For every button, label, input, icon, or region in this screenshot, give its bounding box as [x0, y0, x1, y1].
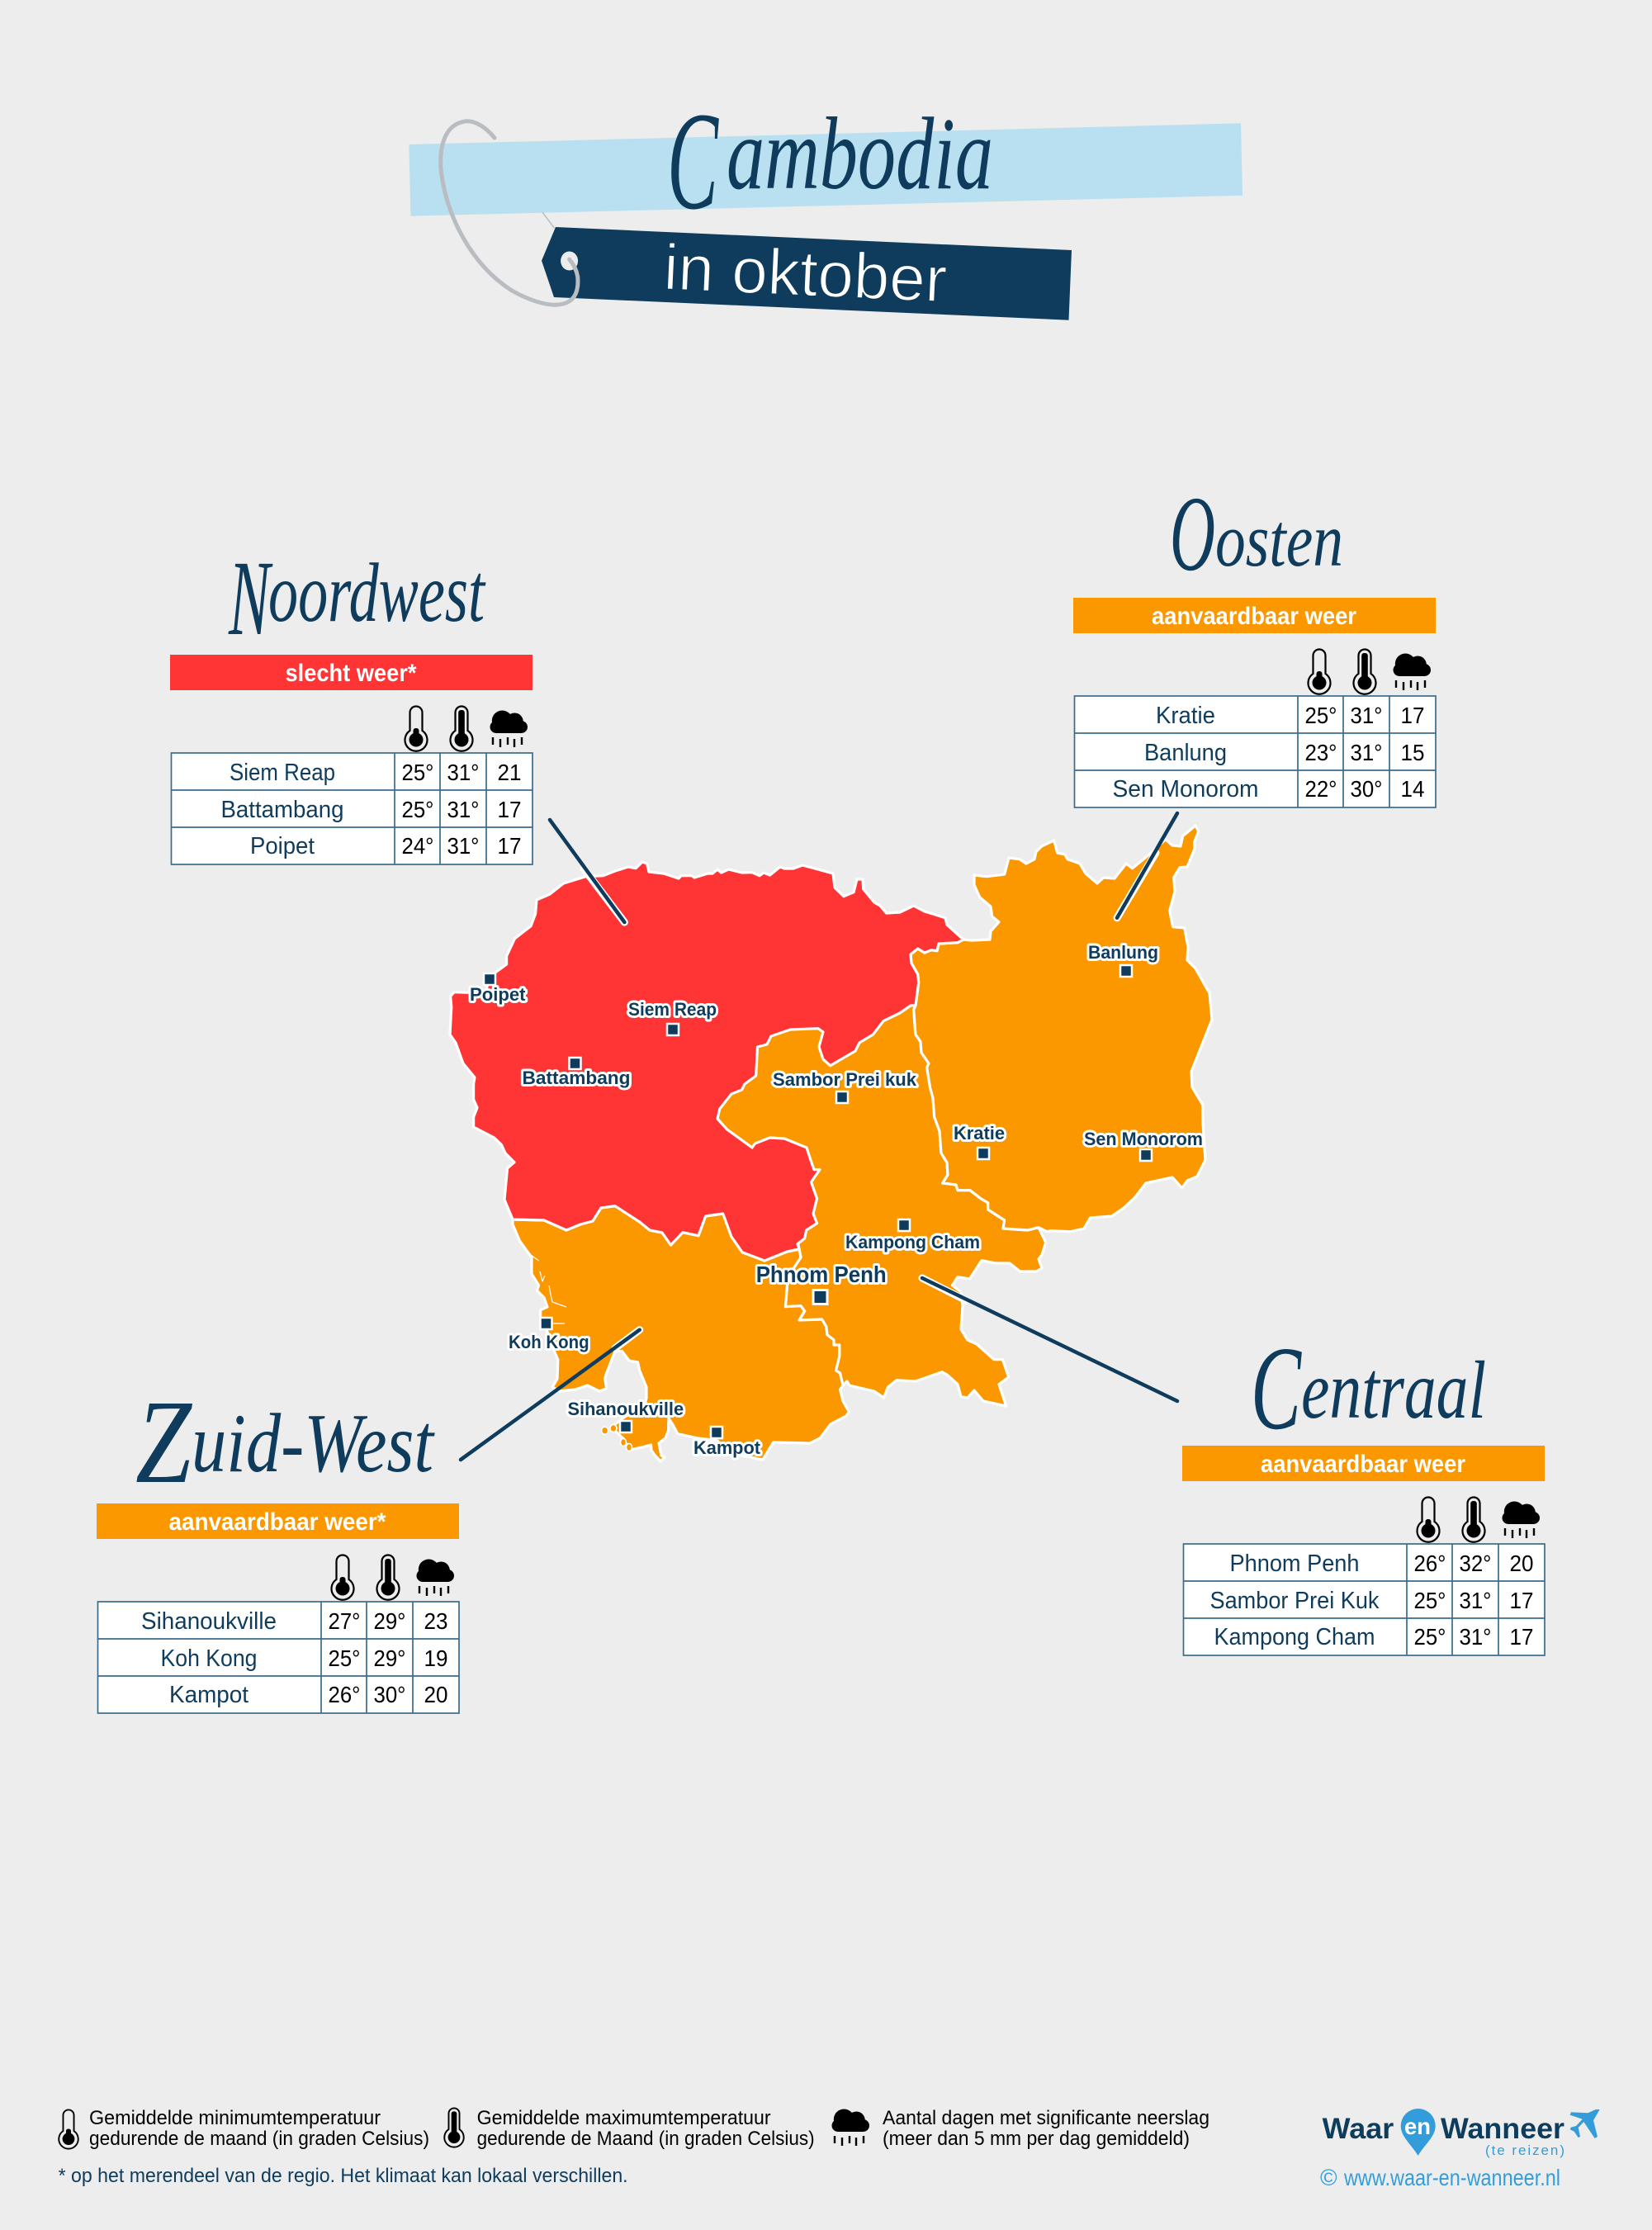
heading: Zuid-West: uid-West — [192, 1397, 435, 1490]
icon: maximum temperature — [451, 707, 472, 751]
label: Kampot: Kampot — [693, 1437, 761, 1458]
connector: Centraal — [922, 1278, 1177, 1401]
climate table: Zuid-West: 19 — [424, 1645, 447, 1671]
panel: Centraal — [1182, 1323, 1545, 1655]
icon: minimum temperature — [1308, 649, 1331, 694]
climate table: Noordwest: Siem Reap — [230, 760, 335, 786]
region: Oosten — [911, 826, 1212, 1232]
logo icon: plane — [1570, 2109, 1600, 2138]
climate table: Noordwest: 17 — [497, 797, 522, 822]
icon: maximum temperature — [1354, 649, 1375, 694]
climate table: Oosten: 23° — [1304, 740, 1337, 765]
logo word: en: en — [1404, 2114, 1431, 2139]
label: Sihanoukville: Sihanoukville — [568, 1399, 684, 1419]
label: Siem Reap: Siem Reap — [628, 999, 717, 1020]
panel: Zuid-West — [97, 1376, 459, 1713]
icon: minimum temperature — [1417, 1498, 1440, 1542]
logo tagline: (te reizen) — [1485, 2142, 1564, 2158]
climate table: Noordwest: 21 — [497, 760, 522, 785]
legend icon: rain cloud — [832, 2109, 869, 2146]
heading: Zuid-West: Z — [135, 1376, 192, 1508]
marker: Banlung — [1120, 965, 1132, 977]
climate table: Zuid-West — [97, 1602, 459, 1713]
title: Cambodia: ambodia — [727, 97, 993, 211]
icon: minimum temperature — [332, 1555, 353, 1600]
marker: Sen Monorom — [1140, 1149, 1152, 1161]
climate table: Oosten: Kratie — [1156, 703, 1215, 729]
heading: Noordwest: oordwest — [268, 547, 486, 640]
legend — [59, 2107, 1209, 2187]
legend text: rain days: Aantal dagen met significante neerslag — [883, 2107, 1209, 2129]
label: Poipet: Poipet — [470, 984, 526, 1005]
icon: rain cloud — [490, 710, 528, 747]
banner: aanvaardbaar weer: aanvaardbaar weer* — [168, 1508, 386, 1536]
label: Koh Kong: Koh Kong — [509, 1332, 589, 1352]
climate table: Zuid-West: Kampot — [169, 1682, 249, 1708]
climate table: Noordwest — [171, 753, 533, 864]
icon: rain cloud — [416, 1559, 454, 1596]
climate table: Centraal: 26° — [1413, 1551, 1446, 1576]
climate table: Centraal: 17 — [1509, 1624, 1534, 1650]
marker: Poipet — [484, 973, 495, 985]
climate table: Centraal: 32° — [1460, 1551, 1491, 1576]
banner: aanvaardbaar weer — [1182, 1446, 1545, 1481]
heading: Centraal: C — [1251, 1323, 1302, 1455]
copyright and website: www.waar-en-wanneer.nl — [1343, 2165, 1560, 2190]
climate table: Centraal — [1183, 1544, 1545, 1655]
tag hole — [561, 251, 578, 271]
climate table: Noordwest: Poipet — [250, 833, 315, 859]
connector: Zuid-West — [461, 1330, 640, 1460]
region: Centraal — [710, 995, 1046, 1406]
legend text: minimum temperature: Gemiddelde minimumtemperatuur — [89, 2107, 381, 2129]
icon: maximum temperature — [1463, 1498, 1484, 1542]
heading: Noordwest: N — [228, 539, 273, 658]
climate table: Zuid-West: Sihanoukville — [141, 1608, 277, 1635]
climate table: Oosten — [1074, 696, 1436, 807]
icon: maximum temperature — [376, 1555, 400, 1600]
connector: Oosten — [1117, 813, 1177, 918]
legend icon: maximum temperature — [444, 2108, 464, 2147]
marker: Kratie — [977, 1148, 989, 1159]
climate table: Zuid-West: 30° — [373, 1682, 406, 1707]
climate table: Centraal: Sambor Prei Kuk — [1210, 1588, 1380, 1614]
logo word: Waar: Waar — [1323, 2113, 1394, 2145]
climate table: Centraal: Phnom Penh — [1230, 1551, 1359, 1577]
climate table: Oosten: 31° — [1351, 703, 1382, 728]
climate table: Centraal: 17 — [1509, 1588, 1534, 1613]
banner: slecht weer: slecht weer* — [286, 660, 417, 687]
climate table: Oosten: 22° — [1304, 776, 1337, 802]
label: Banlung: Banlung — [1088, 942, 1158, 963]
label: Phnom Penh: Phnom Penh — [756, 1262, 887, 1287]
islands — [602, 1425, 632, 1451]
region: Noordwest — [450, 862, 963, 1261]
banner: slecht weer — [170, 655, 533, 690]
icon: rain cloud — [1394, 654, 1431, 690]
legend text: rain days: (meer dan 5 mm per dag gemiddeld) — [883, 2128, 1190, 2150]
banner: aanvaardbaar weer — [97, 1503, 459, 1539]
climate table: Oosten: 25° — [1304, 703, 1337, 728]
title band — [409, 123, 1243, 216]
marker: Koh Kong — [540, 1318, 551, 1329]
label: Sambor Prei kuk: Sambor Prei kuk — [773, 1069, 917, 1090]
tag string — [441, 121, 578, 305]
climate table: Oosten: Sen Monorom — [1113, 776, 1258, 803]
banner: aanvaardbaar weer: aanvaardbaar weer — [1152, 603, 1356, 630]
luggage tag — [542, 227, 1072, 320]
table group: Centraal — [1182, 1446, 1545, 1655]
connector: Noordwest — [550, 820, 624, 922]
climate table: Noordwest: 25° — [401, 760, 434, 785]
marker: Siem Reap — [667, 1024, 679, 1035]
climate table: Noordwest: 25° — [401, 797, 434, 822]
climate table: Noordwest: 17 — [497, 833, 522, 859]
marker: Sambor Prei kuk — [836, 1091, 848, 1103]
label: Kampong Cham: Kampong Cham — [845, 1232, 980, 1252]
legend text: maximum temperature: gedurende de Maand (in graden Celsius) — [477, 2128, 815, 2150]
climate table: Zuid-West: 29° — [373, 1645, 406, 1671]
label: Kratie: Kratie — [954, 1123, 1005, 1143]
banner: aanvaardbaar weer — [1073, 598, 1436, 633]
heading: Centraal: entraal — [1301, 1344, 1486, 1436]
climate table: Zuid-West: 27° — [329, 1608, 360, 1634]
climate table: Oosten: 17 — [1400, 703, 1425, 728]
marker: Battambang — [570, 1058, 581, 1069]
marker: Sihanoukville — [620, 1421, 632, 1432]
climate table: Centraal: 31° — [1460, 1624, 1491, 1650]
climate table: Centraal: Kampong Cham — [1214, 1624, 1375, 1650]
climate table: Zuid-West: 29° — [373, 1608, 406, 1634]
panel: Noordwest — [170, 539, 533, 864]
logo word: Wanneer: Wanneer — [1441, 2113, 1564, 2145]
table group: Oosten — [1073, 598, 1436, 807]
legend icon: minimum temperature — [59, 2109, 78, 2149]
logo pin — [1401, 2109, 1436, 2156]
climate table: Oosten: 31° — [1351, 740, 1382, 765]
banner: aanvaardbaar weer: aanvaardbaar weer — [1261, 1451, 1465, 1478]
legend text: minimum temperature: gedurende de maand (in graden Celsius) — [89, 2128, 429, 2150]
climate table: Noordwest: 31° — [447, 760, 479, 785]
icon: rain cloud — [1503, 1501, 1540, 1538]
legend text: maximum temperature: Gemiddelde maximumtemperatuur — [477, 2107, 771, 2129]
climate table: Oosten: 14 — [1400, 776, 1425, 802]
heading: Oosten: O — [1170, 475, 1215, 594]
climate table: Zuid-West: Koh Kong — [160, 1645, 258, 1672]
climate table: Centraal: 25° — [1413, 1588, 1446, 1613]
climate table: Centraal: 25° — [1413, 1624, 1446, 1650]
logo: Waar en Wanneer — [1320, 2109, 1600, 2190]
climate table: Centraal: 31° — [1460, 1588, 1491, 1613]
subtitle: in oktober: in oktober — [662, 230, 949, 316]
marker: Kampot — [711, 1427, 722, 1438]
climate table: Oosten: Banlung — [1144, 740, 1227, 766]
table group: Zuid-West — [97, 1503, 459, 1713]
climate table: Zuid-West: 25° — [329, 1645, 360, 1671]
copyright and website: © — [1320, 2165, 1337, 2190]
label: Battambang: Battambang — [522, 1068, 631, 1088]
climate table: Oosten: 15 — [1400, 740, 1425, 765]
connector lines — [461, 813, 1177, 1460]
footnote: * op het merendeel van de regio. Het klimaat kan lokaal verschillen. — [59, 2165, 628, 2187]
title block — [409, 83, 1243, 320]
icon: minimum temperature — [405, 707, 428, 751]
climate table: Noordwest: 24° — [401, 833, 434, 859]
climate table: Zuid-West: 26° — [329, 1682, 360, 1707]
climate table: Oosten: 30° — [1351, 776, 1382, 802]
climate table: Noordwest: Battambang — [221, 797, 343, 823]
climate table: Noordwest: 31° — [447, 797, 479, 822]
climate table: Noordwest: 31° — [447, 833, 479, 859]
panel: Oosten — [1073, 475, 1436, 807]
map of Cambodia — [450, 826, 1212, 1461]
marker: Phnom Penh — [813, 1290, 827, 1304]
marker: Kampong Cham — [898, 1219, 910, 1231]
climate table: Centraal: 20 — [1509, 1551, 1534, 1576]
climate table: Zuid-West: 23 — [424, 1608, 447, 1634]
city markers and labels — [470, 942, 1203, 1458]
climate table: Zuid-West: 20 — [424, 1682, 447, 1707]
heading: Oosten: osten — [1215, 498, 1343, 582]
label: Sen Monorom: Sen Monorom — [1084, 1129, 1203, 1149]
title: Cambodia: C — [667, 83, 719, 239]
coastal inlets near Koh Kong — [531, 1255, 566, 1323]
region: Zuid-West — [513, 1206, 849, 1461]
